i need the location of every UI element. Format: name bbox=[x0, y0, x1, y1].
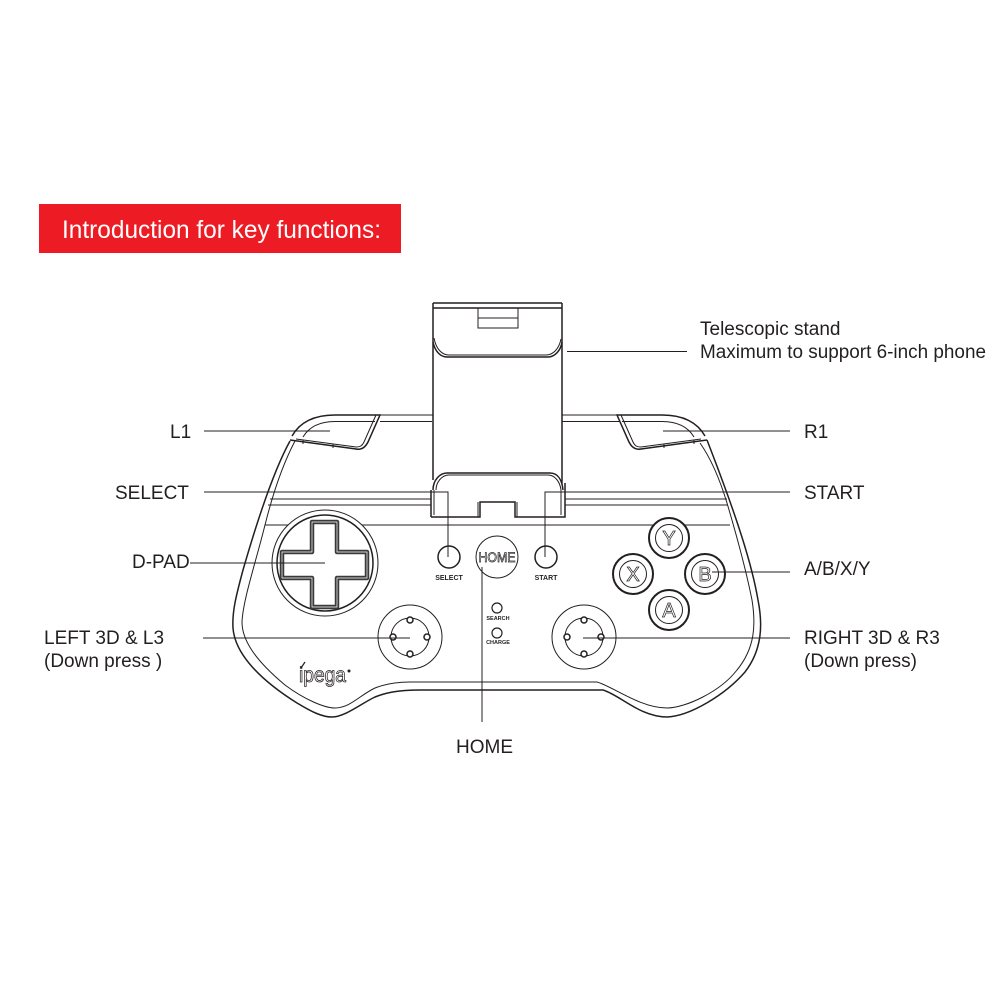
label: HOME: HOME bbox=[456, 737, 513, 758]
label: telescopic stand: Telescopic stand bbox=[700, 319, 840, 340]
heading banner bbox=[39, 204, 401, 253]
label: right 3D: RIGHT 3D & R3 bbox=[804, 628, 940, 649]
start button bbox=[535, 546, 558, 582]
select button bbox=[435, 546, 464, 582]
charge indicator: CHARGE bbox=[486, 640, 510, 646]
face button B bbox=[685, 554, 725, 594]
label: SELECT: SELECT bbox=[115, 483, 189, 504]
left shoulder button L1 bbox=[290, 415, 380, 449]
charge indicator bbox=[486, 628, 510, 646]
callout leader lines bbox=[190, 352, 790, 722]
face button Y bbox=[649, 518, 689, 558]
face button X: X bbox=[626, 564, 640, 586]
start button: START bbox=[535, 575, 558, 582]
face button Y: Y bbox=[662, 528, 676, 550]
label: L1: L1 bbox=[170, 422, 191, 443]
controller body bbox=[233, 415, 761, 717]
right shoulder button R1 bbox=[617, 415, 707, 449]
label: left down press: (Down press ) bbox=[44, 651, 162, 672]
face button X bbox=[613, 554, 653, 594]
search indicator: SEARCH bbox=[486, 616, 510, 622]
D-pad bbox=[272, 510, 378, 616]
left stick bbox=[378, 605, 442, 669]
label: START: START bbox=[804, 483, 865, 504]
home button: HOME bbox=[478, 550, 516, 565]
right stick bbox=[552, 605, 616, 669]
label: right down press: (Down press) bbox=[804, 651, 917, 672]
label: maximum phone size: Maximum to support 6-inch phone bbox=[700, 342, 986, 363]
label: A/B/X/Y: A/B/X/Y bbox=[804, 559, 871, 580]
face button A bbox=[649, 590, 689, 630]
label: left 3D: LEFT 3D & L3 bbox=[44, 628, 164, 649]
home button bbox=[476, 536, 518, 578]
search indicator bbox=[486, 603, 510, 622]
label: D-PAD: D-PAD bbox=[132, 552, 190, 573]
ipega logo: ipega bbox=[299, 664, 346, 687]
face button B: B bbox=[698, 564, 712, 586]
label: R1: R1 bbox=[804, 422, 828, 443]
heading banner: Introduction for key functions: bbox=[62, 216, 381, 244]
face button A: A bbox=[662, 600, 676, 622]
select button: SELECT bbox=[435, 575, 464, 582]
gamepad drawing bbox=[233, 303, 761, 717]
telescopic stand bbox=[431, 303, 565, 517]
